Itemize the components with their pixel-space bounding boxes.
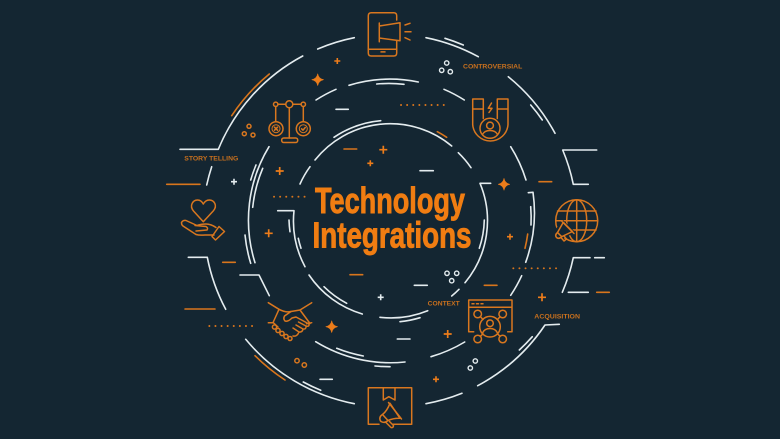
icon: handshake xyxy=(268,303,312,340)
label: acquisition: ACQUISITION xyxy=(534,314,580,320)
label: context: CONTEXT xyxy=(428,300,460,308)
small circles xyxy=(242,61,477,370)
icon: heart in hand xyxy=(182,200,224,240)
icon: globe with megaphone xyxy=(556,200,598,242)
icon: balance scales xyxy=(269,101,310,142)
outer ring xyxy=(167,38,609,404)
dotted lines xyxy=(209,105,559,326)
label: controversial: CONTROVERSIAL xyxy=(463,64,522,71)
label: story telling: STORY TELLING xyxy=(184,155,238,162)
icon: magnet xyxy=(473,99,508,141)
icon: phone megaphone xyxy=(368,13,411,56)
inner ring xyxy=(278,121,491,322)
middle ring xyxy=(240,79,534,367)
icon: box with megaphone xyxy=(368,388,412,428)
short dashes xyxy=(223,109,497,379)
title: Technology xyxy=(315,180,465,221)
title xyxy=(312,180,472,256)
icon: window with network xyxy=(469,300,512,343)
title: Integrations xyxy=(312,214,472,256)
sparkles xyxy=(231,58,546,382)
